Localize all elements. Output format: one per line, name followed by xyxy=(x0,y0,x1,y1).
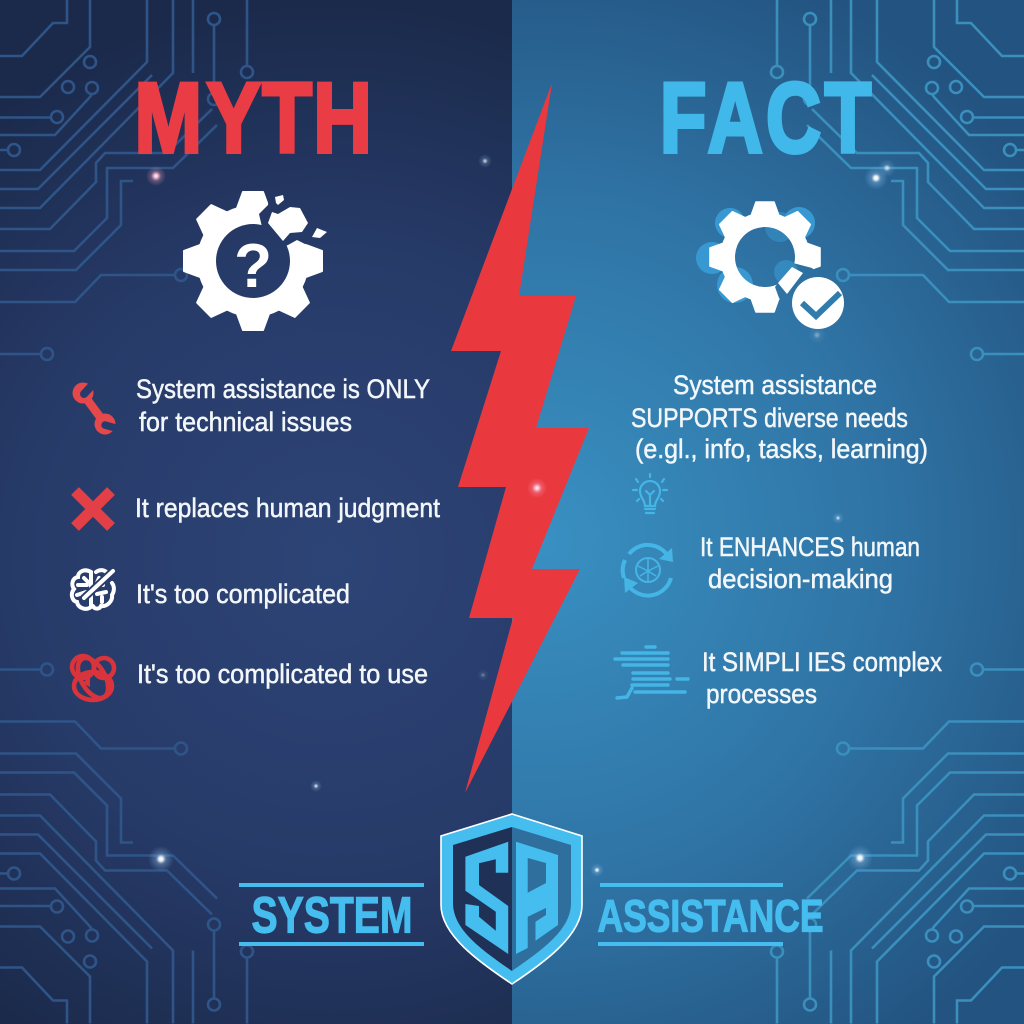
title: MYTH: MYTH xyxy=(134,63,372,174)
myth text: human judgment: It replaces human judgment xyxy=(135,493,440,523)
fact text: simplifies processes: processes xyxy=(706,679,817,709)
fact text: simplifies processes xyxy=(702,647,942,709)
bolt spark xyxy=(527,478,547,498)
fact text: enhances decisions: decision-making xyxy=(708,564,893,594)
logo: SA shield xyxy=(441,814,582,984)
fact text: diverse needs xyxy=(631,370,928,464)
icon: broken gear with question mark: ? xyxy=(234,232,272,301)
myth text: complicated to use: It's too complicated to use xyxy=(137,659,428,689)
icon: light bulb xyxy=(633,474,667,513)
myth text: technical issues xyxy=(136,374,430,437)
panel: fact background xyxy=(512,0,1024,1024)
title: FACT: FACT xyxy=(660,62,871,173)
icon: simplified process stack xyxy=(615,647,688,698)
icon: brain with cycle arrows xyxy=(623,545,673,596)
fact text: diverse needs: (e.gl., info, tasks, learning) xyxy=(635,434,928,464)
fact text: enhances decisions: It ENHANCES human xyxy=(700,532,920,562)
fact text: simplifies processes: It SIMPLI IES complex xyxy=(702,647,942,677)
banner: SYSTEM: SYSTEM xyxy=(252,886,412,944)
glowing lights xyxy=(146,154,896,877)
panel: myth background xyxy=(0,0,512,1024)
banner: ASSISTANCE xyxy=(598,883,824,946)
fact text: diverse needs: System assistance xyxy=(673,370,877,400)
banner: ASSISTANCE: ASSISTANCE xyxy=(598,890,824,942)
icon: broken gear with question mark xyxy=(184,192,327,330)
myth text: technical issues: System assistance is ONLY xyxy=(136,374,430,404)
circuit traces: myth side xyxy=(0,0,253,1024)
myth text: too complicated: It's too complicated xyxy=(136,579,350,609)
fact text: enhances decisions xyxy=(700,532,920,594)
icon: red X xyxy=(75,491,111,527)
circuit traces: fact side xyxy=(771,0,1024,1024)
icon: crossed brain xyxy=(72,570,114,609)
myth text: technical issues: for technical issues xyxy=(139,407,352,437)
icon: gear with check mark xyxy=(696,202,844,329)
icon: wrench xyxy=(72,382,116,434)
icon: tangled knot xyxy=(72,653,114,703)
fact text: diverse needs: SUPPORTS diverse needs xyxy=(631,403,908,433)
lightning bolt divider xyxy=(451,83,589,793)
